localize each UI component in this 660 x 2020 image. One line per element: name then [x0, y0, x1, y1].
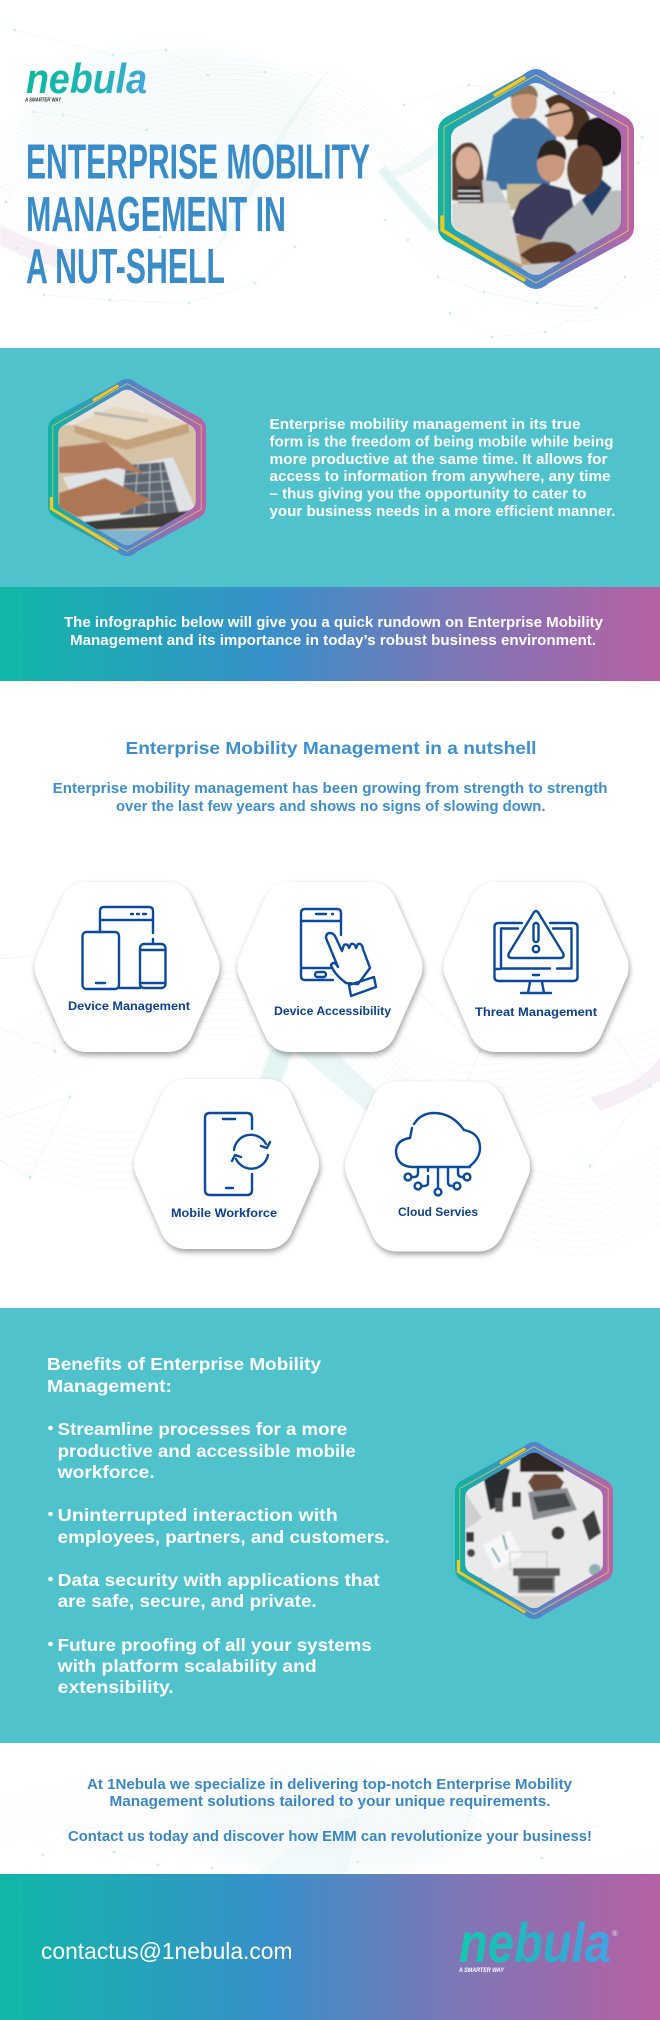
- intro paragraph: your business needs in a more efficient manner.: [270, 504, 616, 520]
- nutshell heading: Enterprise Mobility Management in a nutshell: [126, 738, 536, 758]
- hexagon photo: hands typing on laptop: [48, 379, 206, 556]
- card: threat management: [444, 882, 628, 1052]
- benefits list: Streamline processes for a more: [58, 1419, 347, 1439]
- intro paragraph: access to information from anywhere, any time: [270, 469, 611, 485]
- intro paragraph: more productive at the same time. It allows for: [270, 452, 608, 468]
- panel: footer: [0, 1874, 660, 2020]
- background mesh waves: [0, 29, 660, 338]
- card: cloud services: [345, 1082, 530, 1252]
- label: Device Accessibility: [274, 1004, 391, 1018]
- laptop: [452, 203, 522, 265]
- title: A NUT-SHELL: [26, 239, 225, 294]
- benefits list: productive and accessible mobile: [58, 1441, 356, 1461]
- background mesh waves: [0, 953, 660, 1255]
- intro paragraph: – thus giving you the opportunity to cater to: [270, 486, 587, 502]
- band text: The infographic below will give you a quick rundown on Enterprise Mobility: [64, 615, 603, 631]
- card: device management: [34, 882, 220, 1052]
- man in dark shirt: [509, 183, 578, 240]
- nutshell description: [53, 781, 608, 815]
- benefits list: Uninterrupted interaction with: [58, 1505, 338, 1525]
- icon: devices: [82, 907, 166, 989]
- logo: nebula: A SMARTER WAY: [24, 98, 61, 104]
- call to action text: Management solutions tailored to your unique requirements.: [110, 1794, 550, 1810]
- benefits list: employees, partners, and customers.: [58, 1527, 390, 1547]
- benefits heading: Management:: [47, 1376, 172, 1396]
- intro paragraph: form is the freedom of being mobile while being: [270, 434, 614, 450]
- title: ENTERPRISE MOBILITY: [26, 134, 370, 190]
- title: [26, 134, 370, 294]
- title: MANAGEMENT IN: [26, 187, 286, 242]
- icon: monitor warning: [494, 911, 578, 993]
- label: Cloud Servies: [398, 1205, 478, 1219]
- footer logo: nebula: [459, 1911, 611, 1974]
- card: device accessibility: [238, 882, 422, 1052]
- woman with glasses: [544, 94, 591, 141]
- panel: call to action: [0, 1743, 660, 1906]
- band text: Management and its importance in today’s robust business environment.: [70, 633, 596, 649]
- benefits heading: [47, 1354, 321, 1396]
- icon: cloud circuit: [396, 1113, 480, 1195]
- card: mobile workforce: [134, 1079, 319, 1249]
- label: Device Management: [68, 999, 190, 1013]
- woman on the left: [452, 142, 484, 205]
- hexagon photo: overhead desk: [455, 1440, 615, 1620]
- benefits list: workforce.: [57, 1462, 155, 1482]
- panel: nutshell: [0, 681, 660, 1308]
- intro paragraph: Enterprise mobility management in its true: [270, 417, 581, 433]
- benefits list: with platform scalability and: [57, 1656, 317, 1676]
- nutshell description: over the last few years and shows no signs of slowing down.: [116, 799, 546, 815]
- icon: phone and hand: [301, 909, 376, 996]
- hero panel: [0, 28, 660, 338]
- man in denim shirt: [484, 117, 558, 191]
- band text: [64, 615, 603, 649]
- label: Threat Management: [475, 1005, 597, 1019]
- gradient band: [0, 587, 660, 681]
- benefits list: extensibility.: [58, 1677, 174, 1697]
- benefits list: Data security with applications that: [58, 1570, 380, 1590]
- benefits heading: Benefits of Enterprise Mobility: [47, 1354, 321, 1374]
- contact email: contactus@1nebula.com: [41, 1938, 292, 1964]
- footer logo: ®: [612, 1929, 618, 1938]
- logo: nebula: nebula: [26, 55, 147, 102]
- benefits list: are safe, secure, and private.: [58, 1591, 317, 1611]
- front woman: [577, 117, 623, 167]
- nutshell description: Enterprise mobility management has been growing from strength to strength: [53, 781, 608, 797]
- footer logo: A SMARTER WAY: [458, 1967, 505, 1974]
- benefits list: [48, 1419, 390, 1697]
- panel: introduction: [0, 348, 660, 587]
- label: Mobile Workforce: [171, 1206, 277, 1220]
- call to action text: [68, 1777, 592, 1845]
- intro paragraph: [270, 417, 616, 520]
- icon: phone with sync arrows: [205, 1113, 270, 1195]
- benefits list: Future proofing of all your systems: [58, 1635, 372, 1655]
- call to action text: Contact us today and discover how EMM can revolutionize your business!: [68, 1829, 592, 1845]
- call to action text: At 1Nebula we specialize in delivering top-notch Enterprise Mobility: [87, 1777, 572, 1793]
- hexagon photo: team around a laptop: [438, 69, 634, 289]
- background mesh waves: [0, 1765, 660, 1906]
- panel: benefits: [0, 1308, 660, 1743]
